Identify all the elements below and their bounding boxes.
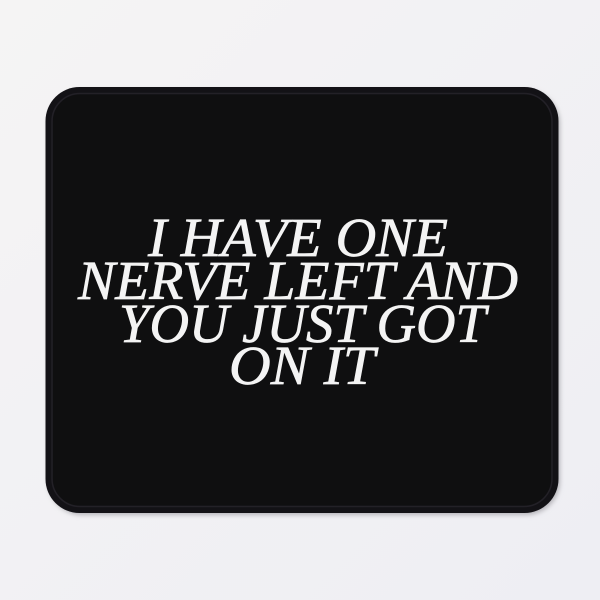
- mouse mat: [46, 87, 558, 513]
- quote text: [77, 207, 518, 396]
- quote text: NERVE LEFT AND: [77, 250, 518, 311]
- quote text: YOU JUST GOT: [119, 293, 489, 354]
- quote text: I HAVE ONE: [147, 207, 448, 268]
- quote text: ON IT: [229, 335, 379, 396]
